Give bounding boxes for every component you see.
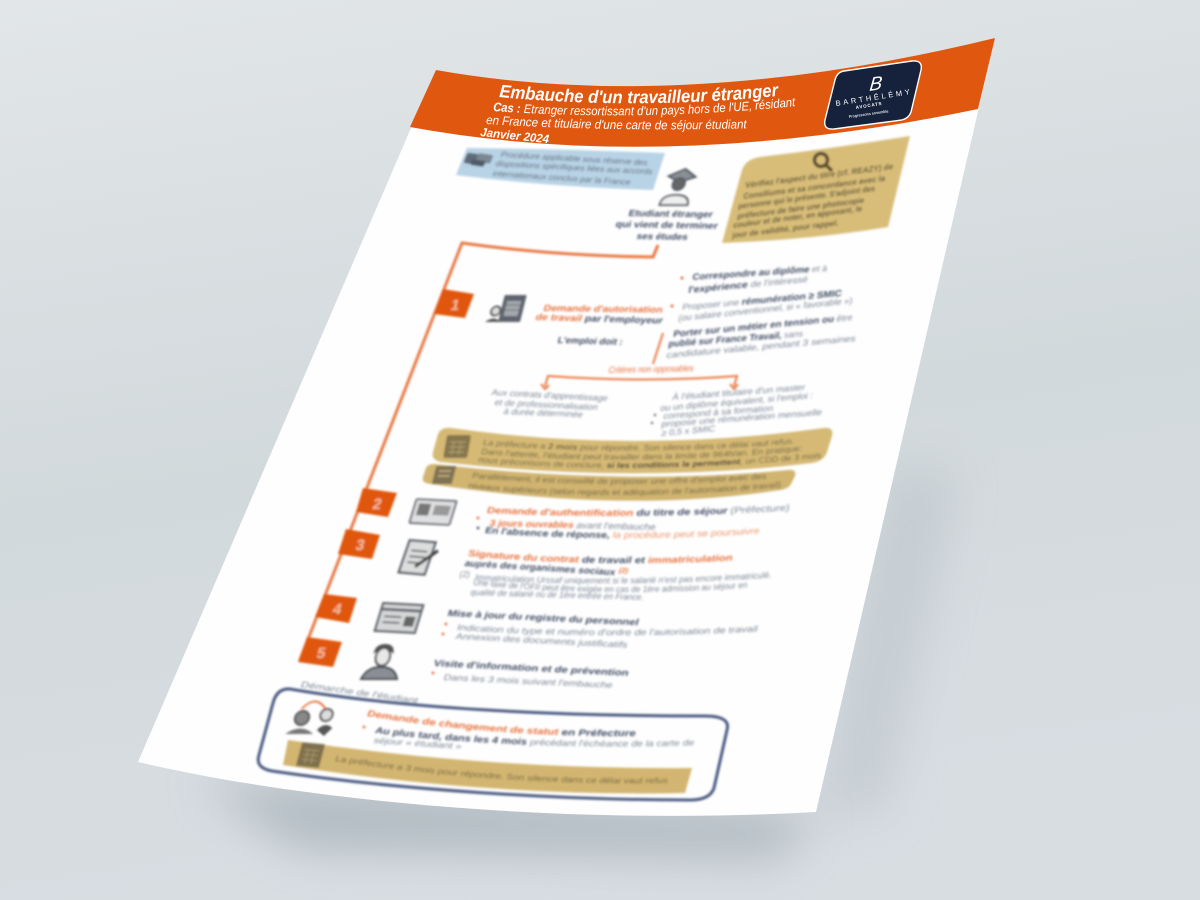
icon: handshake	[463, 152, 494, 168]
exemption: master graduate: À l'étudiant titulaire d'un master	[672, 382, 806, 402]
step 4 text: Mise à jour du registre du personnel	[446, 608, 640, 627]
arrow to exemptions	[653, 333, 663, 364]
step 3 text: Immatriculation Urssaf uniquement si le salarié n'est pas encore immatriculé.	[474, 570, 771, 586]
icon: contract and pen	[399, 540, 441, 575]
step 1 badge	[434, 289, 474, 318]
icon: personnel register	[375, 603, 423, 633]
case description: Cas : Etranger ressortissant d'un pays hors de l'UE, résidant	[494, 98, 796, 118]
employment requirements list: l'expérience de l'intéressé	[688, 274, 809, 295]
header text	[480, 84, 796, 143]
exemption: master graduate: propose une rémunération mensuelle	[661, 407, 823, 429]
step 3 text: auprès des organismes sociaux	[463, 558, 603, 576]
icon: graduate student	[660, 169, 697, 205]
delay text: Dans l'attente, l'étudiant peut travailler dans la limite de 964h/an. En pratique:	[480, 446, 801, 462]
employment requirements list: Correspondre au diplôme et à	[692, 263, 828, 282]
status title: Demande de changement de statut en Préfecture	[366, 708, 637, 738]
exemption: master graduate: ou un diplôme équivalent, si l'emploi :	[660, 390, 814, 413]
icon: writing pad	[432, 466, 456, 484]
exemption: apprenticeship: et de professionnalisation	[493, 397, 599, 412]
status deadline: Au plus tard, dans les 4 mois précédant l'échéance de la carte de	[374, 726, 695, 748]
exemption: apprenticeship	[490, 387, 609, 419]
step 4 text: Annexion des documents justificatifs	[454, 631, 629, 650]
panel: tan verification note	[722, 136, 910, 243]
step 5 badge	[298, 637, 342, 667]
icon: calendar	[443, 435, 471, 458]
icon: residence permit card	[409, 499, 457, 525]
verification text: Consiliums et sa concordance avec la	[743, 174, 886, 201]
student label	[614, 208, 720, 242]
icon: calendar small	[296, 742, 325, 768]
logo: BARTHÉLÉMY	[835, 87, 910, 108]
header band	[410, 38, 995, 147]
callout: advice	[421, 462, 797, 502]
exemption: apprenticeship: à durée déterminée	[502, 406, 584, 419]
blue note text	[491, 150, 654, 187]
blue note text: Procédure applicable sous réserve des	[499, 150, 649, 167]
panel: change of status: séjour « étudiant »	[372, 735, 464, 751]
step 4 badge	[315, 594, 357, 623]
step 2 badge	[356, 488, 397, 517]
logo	[825, 61, 921, 129]
sheet floor shadow	[200, 782, 816, 856]
advice text: niveaux supérieurs (selon regards et adéquation de l'autorisation de travail)	[468, 480, 782, 498]
exemptions bracket arrow	[541, 376, 738, 389]
paper sheet	[138, 38, 995, 816]
sheet side shadow	[816, 470, 955, 815]
step 5 badge: 5	[315, 645, 328, 662]
step 3 text	[458, 548, 771, 602]
employment condition label: L'emploi doit :	[556, 335, 624, 347]
icon: employer with form	[485, 295, 527, 322]
advice text: Parallèlement, il est conseillé de proposer une offre d'emploi avec des	[472, 472, 767, 486]
verification text: jour de validité, pour rappel.	[731, 218, 839, 240]
step 3 text: qualité de salarié ou de 1ère entrée en France.	[469, 587, 645, 602]
step 4 text	[440, 608, 759, 650]
verification text: personne qui le présente. S'adjoint des	[738, 184, 876, 211]
icon: two people	[285, 702, 337, 736]
step 1 title: de travail par l'employeur	[534, 312, 665, 326]
step 3 text: (2)	[459, 569, 471, 579]
status delay callout	[282, 738, 694, 795]
student label: ses études	[635, 231, 689, 242]
step 5 text: Dans les 3 mois suivant l'embauche	[442, 672, 614, 690]
logo: Progressons ensemble	[848, 108, 889, 119]
employment requirements list: Proposer une rémunération ≥ SMIC	[682, 288, 843, 312]
callout: prefecture delay	[431, 426, 834, 475]
status delay text: La préfecture a 3 mois pour répondre. Son silence dans ce délai vaut refus	[334, 756, 668, 784]
icon: occupational doctor	[361, 644, 403, 679]
logo: B	[868, 73, 883, 96]
employment requirements list	[666, 263, 857, 360]
verification text: Vérifiez l'aspect du titre (cf. REAZY) de	[745, 162, 894, 190]
icon: magnifier	[814, 154, 832, 171]
verification text	[731, 162, 894, 240]
timeline connector	[300, 243, 658, 660]
step 4 text: Indication du type et numéro d'ordre de l'autorisation de travail	[456, 624, 759, 637]
step 1 title	[534, 303, 665, 326]
step 3 text: (2)	[618, 567, 630, 575]
exemption: apprenticeship: Aux contrats d'apprentissage	[490, 387, 609, 403]
employment requirements list: Porter sur un métier en tension ou être	[673, 312, 854, 339]
delay text: La préfecture a 2 mois pour répondre. Son silence dans ce délai vaut refus.	[482, 438, 794, 452]
title: Embauche d'un travailleur étranger	[499, 84, 778, 104]
step 4 badge: 4	[331, 601, 344, 618]
step 3 text: Signature du contrat de travail et immatriculation	[467, 548, 734, 565]
step 3 badge: 3	[354, 537, 366, 554]
step 5 text: Visite d'information et de prévention	[432, 658, 631, 678]
employment requirements list: candidature valable, pendant 3 semaines	[666, 333, 857, 360]
step 2 text: En l'absence de réponse, la procédure peut se poursuivre	[484, 526, 760, 541]
verification text: préfecture de faire une photocopie	[737, 196, 865, 221]
step 2 text: 3 jours ouvrables avant l'embauche	[488, 518, 657, 532]
panel: change of status	[255, 686, 730, 804]
step 2 text	[475, 503, 790, 541]
delay text: nous préconisons de conclure, si les conditions le permettent, un CDD de 3 mois	[478, 452, 822, 470]
employment requirements list: (ou salaire conventionnel, si « favorable »)	[678, 295, 853, 323]
panel: blue note	[456, 148, 665, 190]
student label: qui vient de terminer	[614, 219, 720, 231]
logo: AVOCATS	[855, 101, 882, 110]
exemption: master graduate: correspond à sa formation	[663, 403, 774, 421]
step 3 badge	[338, 529, 380, 559]
exemption: master graduate: ≥ 0,5 x SMIC	[661, 423, 716, 438]
step 2 text: Demande d'authentification du titre de séjour (Préfecture)	[486, 503, 790, 518]
date: Janvier 2024	[480, 128, 550, 143]
blue note text: dispositions spécifiques liées aux accords	[494, 159, 654, 176]
blue note text: internationaux conclus par la France	[491, 169, 632, 187]
verification text: couleur et de noter, en apposant, le	[733, 204, 863, 230]
case description line 2: en France et titulaire d'une carte de séjour étudiant	[486, 116, 747, 132]
step 5 text	[432, 658, 631, 690]
advice text	[468, 472, 782, 498]
sheet content	[255, 134, 911, 804]
exemption: master graduate	[651, 382, 823, 438]
student label: Etudiant étranger	[627, 208, 715, 219]
step 3 text: Une taxe de l'OFII peut être exigée en cas de 1ère admission au séjour en	[472, 578, 748, 594]
employment requirements list: publié sur France Travail, sans	[668, 328, 804, 349]
delay text	[478, 438, 822, 470]
section label: student steps: Démarche de l'étudiant	[299, 679, 421, 705]
step 2 badge: 2	[371, 496, 383, 513]
step 1 badge: 1	[449, 297, 462, 314]
exemptions label: Critères non opposables	[608, 363, 695, 375]
step 1 title: Demande d'autorisation	[542, 303, 665, 315]
